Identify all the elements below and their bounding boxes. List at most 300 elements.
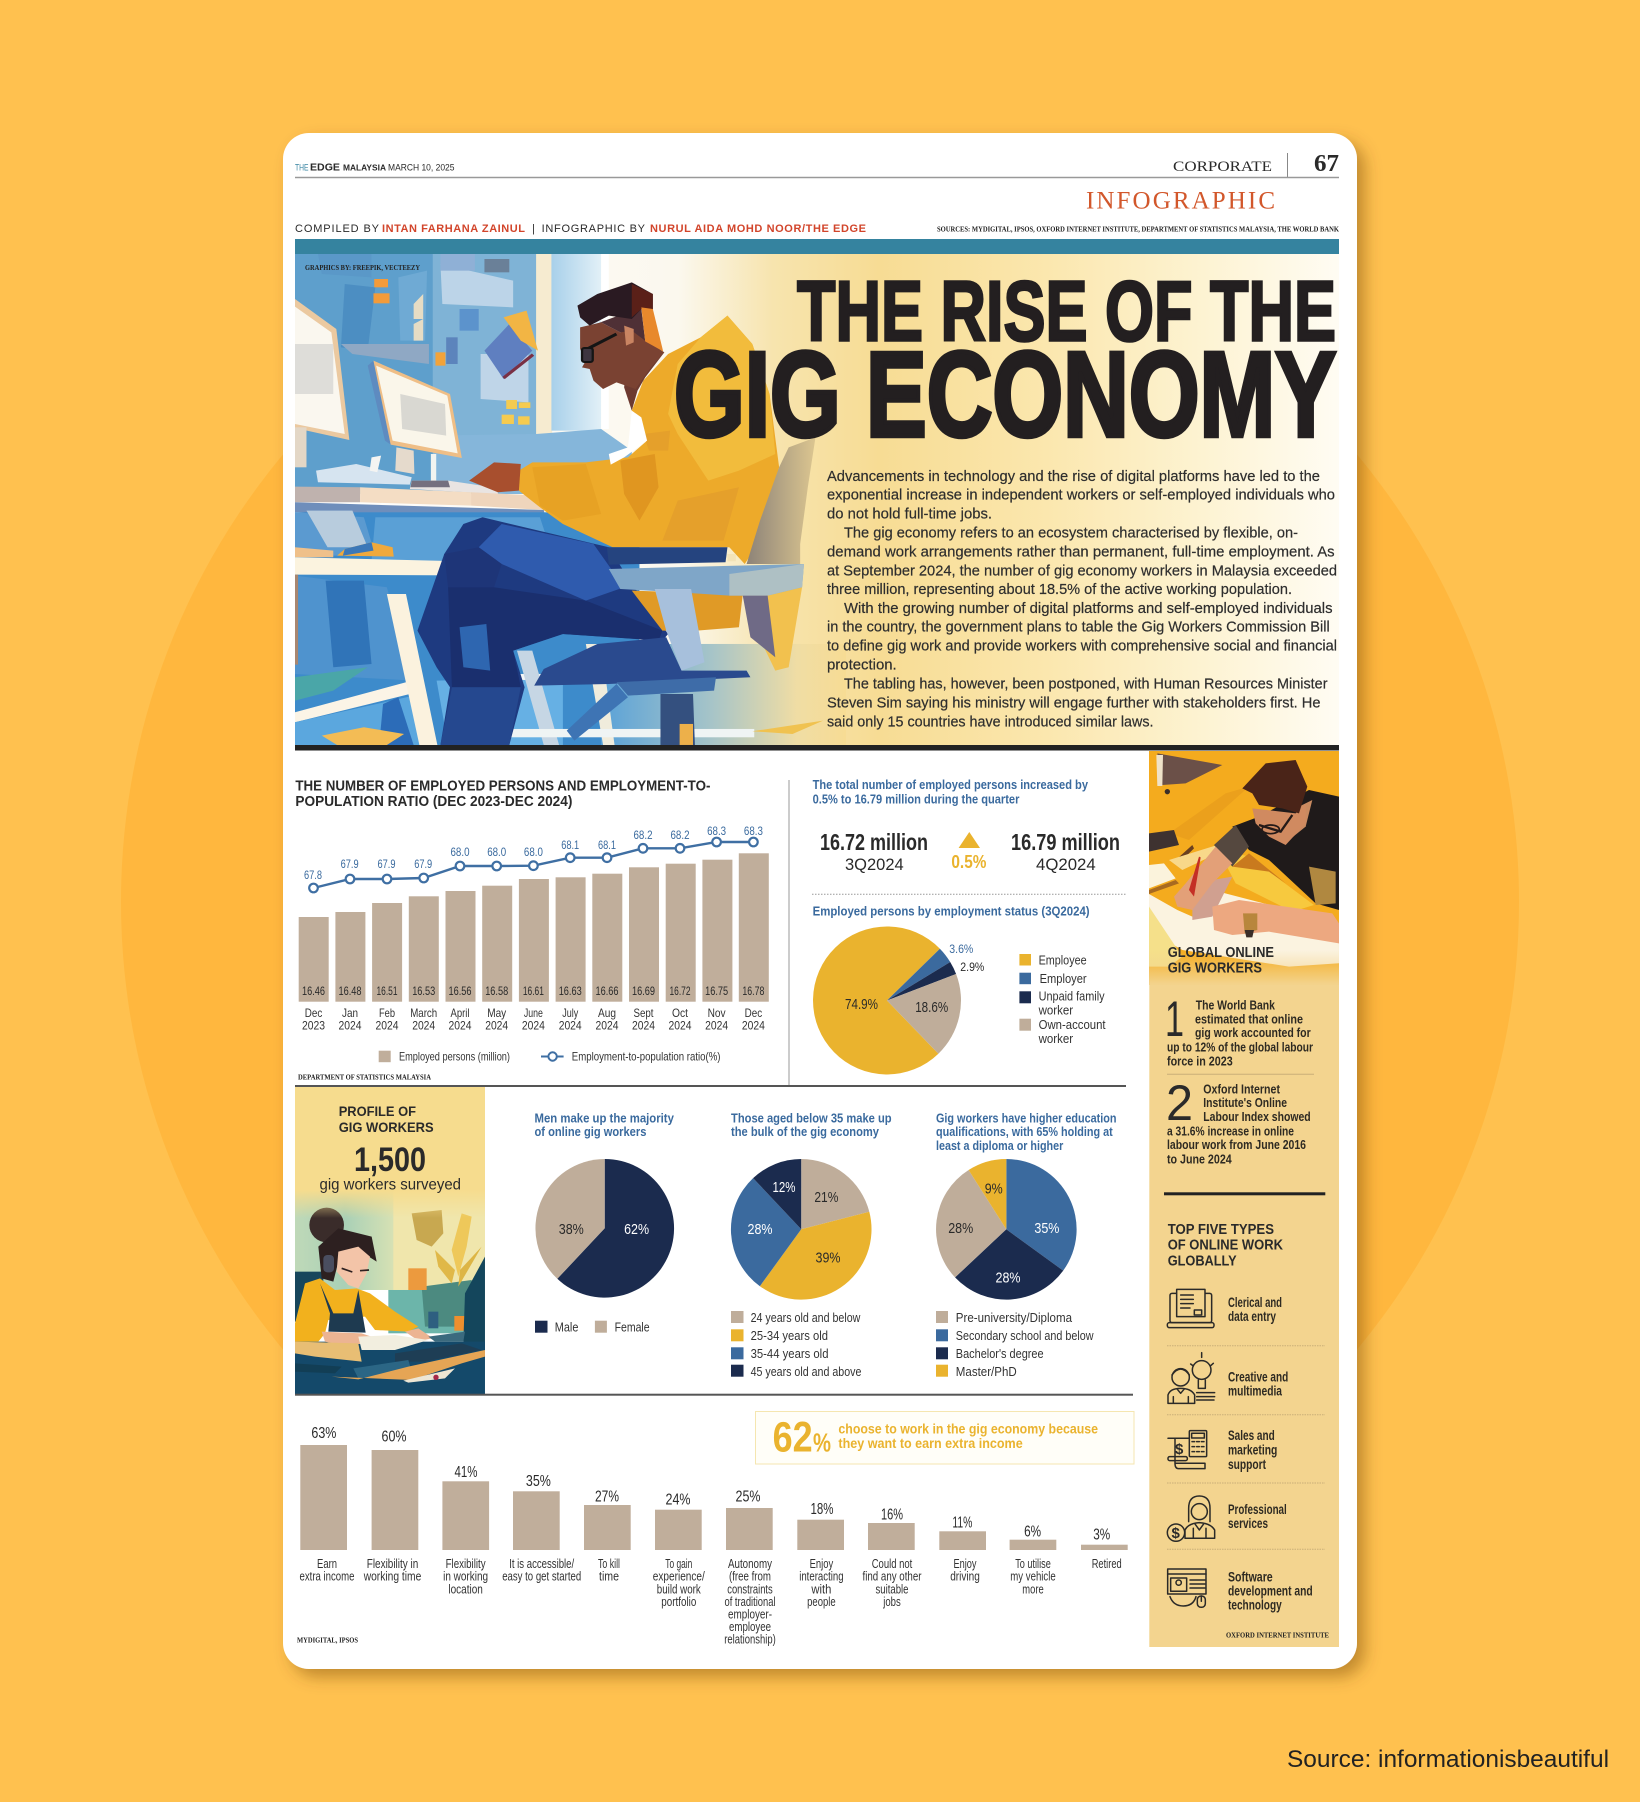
hero panel with illustration, title and intro text (295, 254, 1339, 746)
stat: 3Q2024 (820, 829, 928, 874)
work type 3: sales (1168, 1428, 1277, 1472)
bar captions: with (811, 1582, 831, 1596)
pie chart: gender: 38% (559, 1221, 584, 1238)
gender heading: Men make up the majority (534, 1112, 674, 1126)
age legend: 25-34 years old (751, 1328, 828, 1343)
panel: employment status pie (813, 904, 1106, 1074)
month axis labels: Sept (634, 1006, 654, 1020)
pie chart: education: 35% (1034, 1220, 1059, 1237)
month axis labels: April (450, 1006, 470, 1020)
bar captions: Could not (872, 1557, 913, 1571)
bar chart: employed persons (299, 853, 769, 1002)
bar captions: extra income (300, 1570, 355, 1584)
stat: 1,500 surveyed: gig workers surveyed (320, 1176, 461, 1194)
head (580, 322, 664, 389)
line chart: employment-to-population ratio: 68.0 (487, 845, 506, 859)
education legend: Master/PhD (956, 1364, 1017, 1379)
education heading: Gig workers have higher education (936, 1112, 1116, 1126)
bar percentages: 60% (382, 1428, 407, 1445)
fact 2: to June 2024 (1167, 1152, 1232, 1166)
month axis labels: 2024 (668, 1018, 692, 1032)
bar captions: employer- (728, 1607, 772, 1621)
title: THE RISE OF THE (797, 264, 1336, 360)
gender legend: Male (555, 1320, 578, 1335)
shoe (337, 542, 394, 557)
intro text: exponential increase in independent workers or self-employed individuals who (827, 487, 1335, 504)
bar percentages: 27% (595, 1488, 619, 1505)
chart heading (295, 778, 711, 810)
bar values: 16.61 (523, 986, 544, 998)
stat: 3Q2024: 16.72 million (820, 829, 928, 855)
icon: person with light bulb (1168, 1353, 1215, 1403)
panel: age pie (731, 1112, 892, 1379)
masthead: 67 (1314, 151, 1339, 177)
floor highlights (322, 727, 404, 745)
intro text: in the country, the government plans to table the Gig Workers Commission Bill (827, 619, 1330, 636)
work type 3: sales: marketing (1228, 1442, 1277, 1458)
illustration: man drawing (1149, 750, 1339, 985)
fact 2: a 31.6% increase in online (1167, 1124, 1294, 1138)
monitors (295, 299, 349, 440)
pie legend: worker (1038, 1002, 1074, 1018)
month axis labels: May (487, 1006, 506, 1020)
sidebar background (1149, 751, 1339, 1647)
pie chart: education: 9% (985, 1180, 1003, 1198)
month axis labels: 2024 (485, 1018, 508, 1032)
work type 3: sales: support (1228, 1457, 1266, 1472)
icon: woman with coin (1167, 1496, 1215, 1541)
bar percentages: 6% (1024, 1523, 1041, 1540)
work type 2: creative: multimedia (1228, 1384, 1282, 1398)
bar percentages: 25% (736, 1488, 761, 1505)
bar values: 16.63 (559, 986, 582, 998)
panel: gender pie (534, 1112, 674, 1335)
bar values: 16.56 (448, 986, 472, 998)
chart source: DEPARTMENT OF STATISTICS MALAYSIA (298, 1074, 431, 1082)
bar percentages: 16% (881, 1506, 903, 1523)
bar captions: employee (729, 1620, 771, 1634)
bar percentages: 11% (952, 1515, 973, 1532)
icon: up arrow with change: 0.5% (951, 852, 986, 872)
month axis labels: Aug (598, 1006, 616, 1020)
fact 1: gig work accounted for (1195, 1026, 1311, 1040)
graphics credit: GRAPHICS BY: FREEPIK, VECTEEZY (305, 264, 420, 272)
quarterly heading: 0.5% to 16.79 million during the quarter (813, 792, 1020, 806)
line chart: employment-to-population ratio: 68.1 (598, 838, 616, 852)
masthead: MARCH 10, 2025 (388, 162, 454, 172)
panel: employed persons chart (295, 778, 769, 1082)
month axis labels: Dec (745, 1006, 762, 1020)
pie chart: education (936, 1159, 1077, 1300)
education heading: qualifications, with 65% holding at (936, 1125, 1113, 1139)
icon: laptop with document (1167, 1289, 1214, 1328)
age heading: Those aged below 35 make up (731, 1112, 892, 1126)
bar captions: driving (950, 1570, 980, 1584)
chart legend: Employed persons (million) (399, 1050, 510, 1064)
bar captions: location (448, 1582, 483, 1596)
panel: quarterly employment change (813, 778, 1120, 874)
pie chart: employment status: 3.6% (949, 942, 974, 956)
bar captions: Flexibility (446, 1557, 486, 1571)
top five heading: TOP FIVE TYPES (1168, 1222, 1274, 1238)
profile heading: PROFILE OF (339, 1103, 416, 1119)
bar captions: suitable (876, 1582, 909, 1596)
bar values: 16.51 (376, 986, 398, 998)
month axis labels: 2023 (302, 1018, 325, 1032)
quarterly heading (813, 778, 1088, 806)
title (674, 264, 1336, 462)
month axis labels (302, 1006, 765, 1032)
pie chart: gender (535, 1159, 674, 1298)
age legend: 24 years old and below (751, 1310, 861, 1325)
masthead: THE (295, 162, 308, 174)
teal banner bar (295, 239, 1339, 254)
bar captions: It is accessible/ (509, 1557, 575, 1571)
bar values: 16.58 (485, 986, 508, 998)
profile panel illustration (295, 1087, 485, 1395)
icon: calculator with receipt (1168, 1431, 1207, 1469)
work type 3: sales: Sales and (1228, 1428, 1275, 1443)
bar values: 16.66 (596, 986, 618, 998)
icon: dollar sign on coin: $ (1172, 1525, 1180, 1542)
bar captions: portfolio (661, 1595, 696, 1609)
pie chart: education: 28% (948, 1220, 973, 1237)
pie chart: age: 28% (748, 1221, 772, 1238)
month axis labels: 2024 (705, 1018, 728, 1032)
credits line: | (532, 223, 535, 235)
month axis labels: 2024 (522, 1018, 545, 1032)
fact 1 (1165, 991, 1313, 1068)
fact 2: Oxford Internet (1203, 1082, 1281, 1096)
bar captions: jobs (882, 1595, 901, 1609)
bar values: 16.53 (412, 986, 435, 998)
illustration: gig worker at desk (295, 254, 846, 746)
title: GIG ECONOMY (674, 326, 1336, 462)
intro text: With the growing number of digital platforms and self-employed individuals (844, 600, 1332, 617)
pie legend: Own-account (1039, 1017, 1106, 1032)
masthead: EDGE (310, 162, 340, 174)
pie chart: gender: 62% (624, 1221, 649, 1238)
icon: dollar sign on receipt: $ (1175, 1441, 1184, 1458)
pie chart: employment status: 74.9% (845, 996, 878, 1013)
masthead: CORPORATE (1173, 159, 1272, 175)
pie chart: employment status: 2.9% (960, 960, 985, 974)
bar captions: more (1022, 1582, 1044, 1596)
credits line: COMPILED BY (295, 223, 380, 235)
trousers (417, 517, 668, 745)
age legend: 35-44 years old (751, 1346, 828, 1361)
bar captions: Flexibility in (367, 1557, 418, 1571)
work type 1: clerical (1167, 1289, 1282, 1328)
credits line: INTAN FARHANA ZAINUL (382, 223, 525, 235)
work type 4: professional (1167, 1496, 1287, 1542)
education legend: Pre-university/Diploma (956, 1310, 1073, 1325)
intro text (827, 468, 1337, 731)
line chart: employment-to-population ratio: 67.9 (414, 857, 432, 871)
bar captions: easy to get started (502, 1570, 581, 1584)
credits line: NURUL AIDA MOHD NOOR/THE EDGE (650, 223, 866, 235)
education heading: least a diploma or higher (936, 1139, 1063, 1153)
line chart: employment-to-population ratio: 68.1 (561, 838, 579, 852)
bar captions: To gain (665, 1557, 692, 1571)
line chart: employment-to-population ratio: 68.2 (670, 828, 690, 842)
fact 1: estimated that online (1195, 1012, 1303, 1026)
masthead (295, 151, 1339, 178)
bar captions: To utilise (1015, 1557, 1051, 1571)
hero background gradient (295, 254, 1339, 745)
line chart: employment-to-population ratio: 68.3 (744, 824, 763, 838)
fact 1: force in 2023 (1167, 1054, 1233, 1068)
sidebar source: OXFORD INTERNET INSTITUTE (1226, 1632, 1329, 1640)
callout: 62% earn extra income: choose to work in the gig economy because (838, 1422, 1098, 1436)
sources line: SOURCES: MYDIGITAL, IPSOS, OXFORD INTERNET INSTITUTE, DEPARTMENT OF STATISTICS MALAYSIA, THE WORLD BANK (937, 226, 1340, 234)
bar percentages: 63% (311, 1425, 337, 1442)
month axis labels: 2024 (632, 1018, 655, 1032)
credits line (295, 223, 866, 235)
bar captions: build work (657, 1582, 701, 1596)
bar captions (300, 1557, 1122, 1646)
stat: 4Q2024 (1011, 829, 1120, 874)
top five heading: GLOBALLY (1168, 1254, 1237, 1270)
white page card (283, 133, 1357, 1669)
work type 4: professional: services (1228, 1516, 1268, 1531)
intro text: three million, representing about 18.5% of the active working population. (827, 581, 1292, 598)
panel: education pie (936, 1112, 1116, 1379)
chart legend (379, 1050, 720, 1064)
pie chart: education: 28% (996, 1270, 1020, 1286)
pie legend: Employee (1039, 952, 1087, 968)
icon: screen with gear and mouse (1168, 1569, 1206, 1607)
intro text: The tabling has, however, been postponed, with Human Resources Minister (844, 676, 1328, 693)
fact 1: 1 (1165, 991, 1184, 1047)
month axis labels: 2024 (338, 1018, 362, 1032)
fact 2 (1166, 1075, 1311, 1166)
bar captions: Autonomy (728, 1557, 773, 1571)
line chart: employment-to-population ratio: 68.3 (707, 824, 726, 838)
pie chart: age (731, 1159, 872, 1300)
bar percentages: 41% (454, 1464, 478, 1481)
profile heading: GIG WORKERS (339, 1119, 434, 1135)
month axis labels: 2024 (742, 1018, 765, 1032)
month axis labels: Feb (379, 1006, 395, 1020)
work type 5: software: technology (1228, 1598, 1282, 1612)
bar captions: relationship) (724, 1632, 776, 1646)
fact 1: The World Bank (1196, 998, 1275, 1012)
masthead: MALAYSIA (343, 162, 386, 172)
source credit: Source: informationisbeautiful (1287, 1746, 1609, 1773)
keyboard and cables (316, 464, 412, 485)
intro text: at September 2024, the number of gig economy workers in Malaysia exceeded (827, 562, 1337, 579)
intro text: do not hold full-time jobs. (827, 506, 992, 523)
intro text: The gig economy refers to an ecosystem characterised by flexible, on- (844, 525, 1298, 542)
bar values: 16.72 (670, 986, 690, 998)
month axis labels: Jan (342, 1006, 358, 1020)
bar captions: in working (443, 1570, 488, 1584)
pie chart: age: 39% (816, 1250, 840, 1266)
bar captions: working time (363, 1570, 421, 1584)
work type 1: clerical: data entry (1228, 1309, 1276, 1324)
callout: 62% earn extra income: 62 (773, 1414, 813, 1462)
intro text: Advancements in technology and the rise of digital platforms have led to the (827, 468, 1320, 485)
bar percentages: 35% (526, 1473, 551, 1490)
credits line: INFOGRAPHIC BY (542, 223, 646, 235)
intro text: to define gig work and provide workers with comprehensive social and financial (827, 637, 1337, 654)
line chart: employment-to-population ratio (304, 824, 763, 892)
intro text: said only 15 countries have introduced similar laws. (827, 714, 1154, 731)
bar values (302, 986, 764, 998)
age legend (731, 1310, 861, 1379)
stat: 4Q2024: 4Q2024 (1036, 855, 1096, 874)
bar captions: of traditional (724, 1595, 776, 1609)
line chart: employment-to-population ratio: 68.0 (524, 845, 543, 859)
stat: 1,500 surveyed: 1,500 (354, 1141, 426, 1179)
bar percentages: 18% (810, 1501, 834, 1518)
bar captions: Earn (317, 1557, 337, 1571)
black rule under hero (295, 745, 1339, 750)
pie legend (1019, 952, 1106, 1046)
work type 4: professional: Professional (1228, 1502, 1287, 1517)
pie chart: age: 21% (814, 1189, 838, 1206)
fact 1: up to 12% of the global labour (1167, 1040, 1313, 1054)
stat: 3Q2024: 3Q2024 (845, 855, 904, 874)
month axis labels: Oct (672, 1006, 689, 1020)
panel: global online gig workers sidebar (1149, 750, 1339, 1647)
month axis labels: July (562, 1006, 578, 1020)
work type 2: creative (1168, 1353, 1288, 1403)
bar captions: experience/ (653, 1570, 705, 1584)
gender heading: of online gig workers (534, 1125, 646, 1139)
fact 2: Institute's Online (1203, 1096, 1287, 1110)
bar values: 16.46 (302, 986, 325, 998)
fact 2: Labour Index showed (1203, 1110, 1311, 1124)
education legend: Bachelor's degree (956, 1346, 1044, 1361)
bar values: 16.69 (632, 986, 655, 998)
stat: 4Q2024: 16.79 million (1011, 829, 1120, 855)
pie chart: employment status: 18.6% (915, 999, 948, 1016)
bar captions: constraints (727, 1582, 773, 1596)
bar values: 16.78 (742, 986, 764, 998)
education heading (936, 1112, 1116, 1153)
education legend: Secondary school and below (956, 1328, 1094, 1343)
bar percentages (311, 1425, 1110, 1544)
shirt and neck (609, 411, 647, 465)
month axis labels: 2024 (596, 1018, 619, 1032)
callout: 62% earn extra income (756, 1412, 1134, 1464)
age heading (731, 1112, 892, 1139)
top five heading (1168, 1222, 1283, 1270)
second desk (295, 547, 333, 557)
line chart: employment-to-population ratio: 67.8 (304, 868, 322, 882)
work type 2: creative: Creative and (1228, 1370, 1288, 1384)
age legend: 45 years old and above (751, 1364, 861, 1379)
education legend (936, 1310, 1094, 1379)
stat: 1,500 surveyed (320, 1141, 461, 1194)
pie legend: worker (1038, 1031, 1074, 1046)
work type 5: software (1168, 1569, 1313, 1612)
sidebar heading: GLOBAL ONLINE (1168, 945, 1274, 961)
status heading: Employed persons by employment status (3Q2024) (813, 904, 1090, 918)
month axis labels: 2024 (412, 1018, 435, 1032)
bar captions: time (599, 1570, 619, 1584)
gender legend: Female (615, 1320, 650, 1335)
bar chart: reasons (300, 1445, 1128, 1550)
panel: profile of gig workers (295, 1087, 485, 1395)
age heading: the bulk of the gig economy (731, 1125, 879, 1139)
bar captions: Enjoy (954, 1557, 977, 1571)
bar captions: Enjoy (810, 1557, 834, 1571)
pie legend: Employer (1040, 971, 1087, 986)
month axis labels: 2024 (376, 1018, 399, 1032)
work type 5: software: Software (1228, 1570, 1273, 1584)
month axis labels: 2024 (559, 1018, 582, 1032)
bar percentages: 3% (1093, 1527, 1110, 1544)
jacket (519, 316, 779, 564)
fact 2: 2 (1166, 1075, 1193, 1131)
work type 5: software: development and (1228, 1584, 1313, 1598)
sidebar heading (1168, 945, 1274, 976)
hand (469, 462, 521, 492)
pie legend: Unpaid family (1039, 988, 1105, 1004)
bar captions: people (807, 1595, 836, 1609)
callout: 62% earn extra income: % (813, 1428, 831, 1458)
intro text: demand work arrangements rather than permanent, full-time employment. As (827, 544, 1335, 560)
desk (295, 487, 360, 502)
month axis labels: Nov (708, 1006, 726, 1020)
chart heading: THE NUMBER OF EMPLOYED PERSONS AND EMPLOYMENT-TO- (295, 778, 711, 794)
chart legend: Employment-to-population ratio(%) (572, 1050, 720, 1064)
pie chart: employment status (813, 926, 985, 1074)
profile heading (339, 1103, 434, 1135)
month axis labels: 2024 (448, 1018, 472, 1032)
decorative background circle (121, 203, 1519, 1601)
top five heading: OF ONLINE WORK (1168, 1238, 1283, 1254)
bar captions: interacting (799, 1570, 844, 1584)
lower area (295, 512, 639, 746)
bar values: 16.48 (338, 986, 362, 998)
bar percentages: 24% (666, 1492, 691, 1509)
bar captions: (free from (729, 1570, 771, 1584)
gender heading (534, 1112, 674, 1139)
month axis labels: June (524, 1006, 543, 1020)
bar captions: my vehicle (1010, 1570, 1056, 1584)
work type 1: clerical: Clerical and (1228, 1295, 1282, 1310)
bar values: 16.75 (705, 986, 728, 998)
gender legend (535, 1320, 650, 1335)
quarterly heading: The total number of employed persons increased by (813, 778, 1088, 792)
fact 2: labour work from June 2016 (1167, 1138, 1306, 1152)
line chart: employment-to-population ratio: 67.9 (378, 857, 396, 871)
chair (747, 437, 815, 564)
month axis labels: Dec (305, 1006, 322, 1020)
line chart: employment-to-population ratio: 67.9 (341, 857, 359, 871)
line chart: employment-to-population ratio: 68.2 (634, 828, 653, 842)
pie chart: age: 12% (772, 1179, 796, 1196)
bar captions: Retired (1092, 1557, 1122, 1571)
line chart: employment-to-population ratio: 68.0 (450, 845, 470, 859)
bar captions: find any other (862, 1570, 922, 1584)
sidebar heading: GIG WORKERS (1168, 960, 1262, 976)
panel: reasons for gig work (297, 1412, 1134, 1646)
icon: up arrow with change (951, 832, 986, 872)
chart heading: POPULATION RATIO (DEC 2023-DEC 2024) (295, 794, 573, 810)
chart source: MYDIGITAL, IPSOS (297, 1636, 358, 1644)
callout: 62% earn extra income: they want to earn extra income (838, 1436, 1023, 1451)
intro text: Steven Sim saying his ministry will engage further with stakeholders first. He (827, 695, 1320, 712)
intro text: protection. (827, 656, 897, 674)
bar captions: To kill (598, 1557, 620, 1571)
section label: infographic: INFOGRAPHIC (1086, 188, 1275, 214)
month axis labels: March (410, 1006, 437, 1020)
